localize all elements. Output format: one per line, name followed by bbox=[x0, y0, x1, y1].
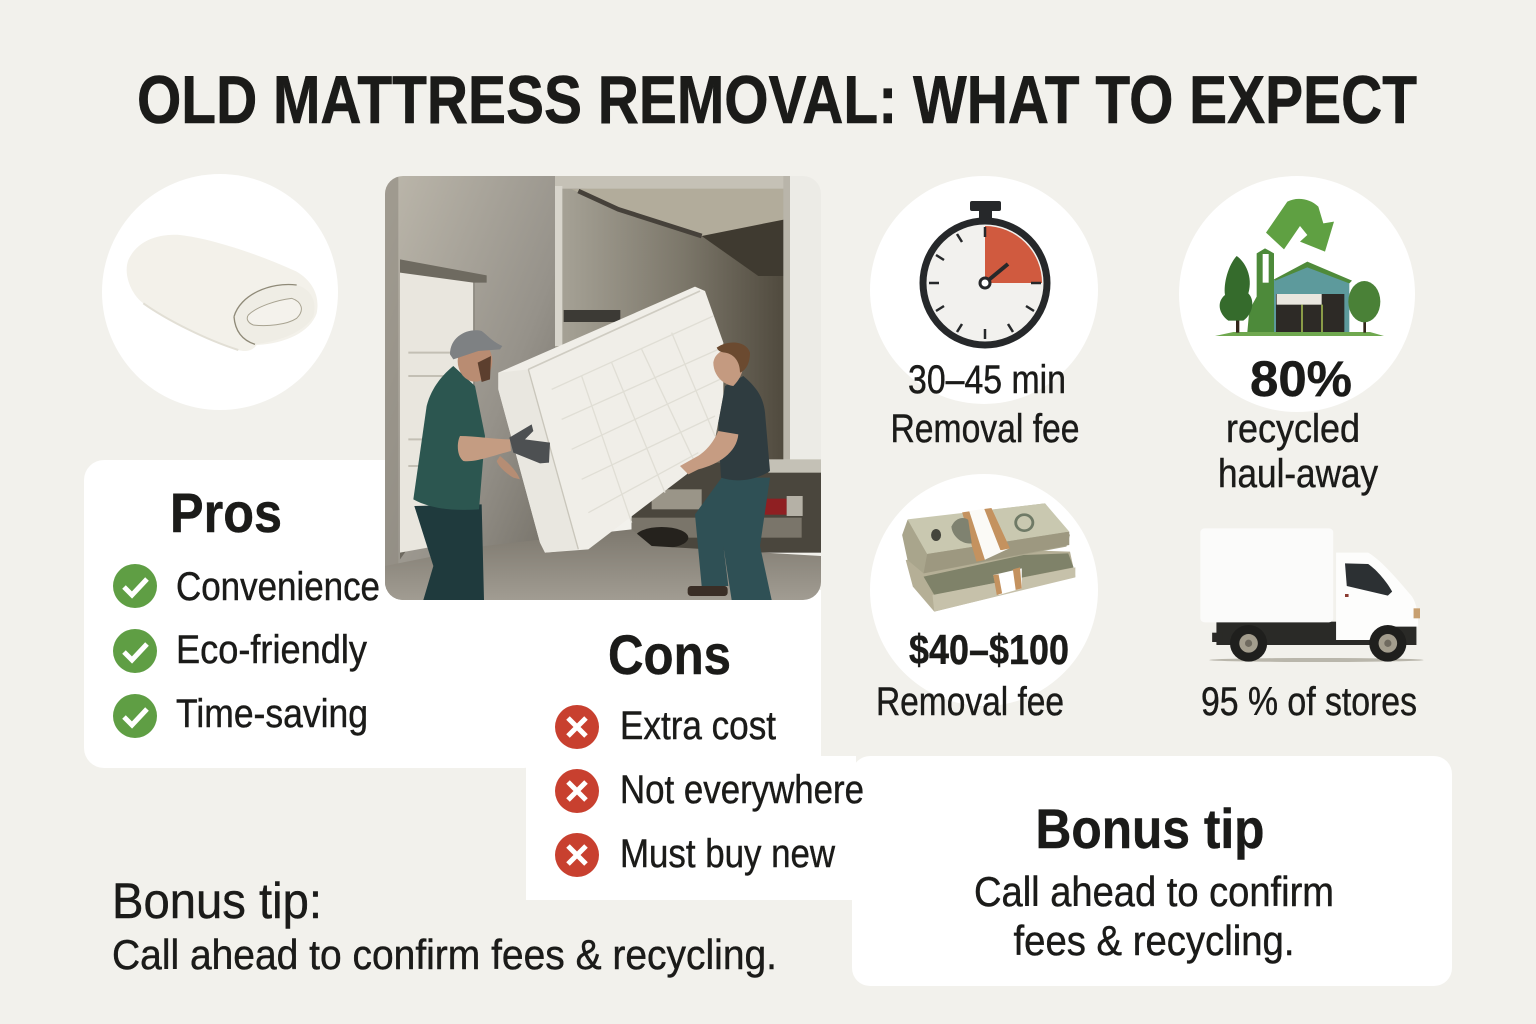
panel: bonus tip card bbox=[852, 756, 1452, 986]
tower bbox=[1247, 248, 1274, 332]
panel: bonus tip card: fees & recycling. bbox=[1014, 917, 1294, 964]
building wall bbox=[385, 176, 557, 600]
upper stack bbox=[902, 503, 1070, 573]
building bbox=[1274, 265, 1349, 332]
stat value: $40–$100 bbox=[909, 626, 1069, 673]
truck ceiling bbox=[572, 188, 784, 236]
card heading: Bonus tip bbox=[1036, 797, 1264, 860]
pro item: eco-friendly bbox=[113, 628, 367, 673]
icon: white box truck bbox=[1200, 528, 1424, 662]
con item: extra cost bbox=[555, 704, 776, 749]
ground bbox=[385, 529, 821, 600]
con item: extra cost: Extra cost bbox=[620, 704, 776, 748]
stat label: Removal fee bbox=[876, 680, 1064, 724]
truck frame and door bbox=[555, 186, 562, 346]
recycle arrow bbox=[1266, 199, 1334, 252]
stat: recycled bbox=[1179, 176, 1415, 496]
pro item: convenience: Convenience bbox=[176, 565, 380, 609]
bonus tip text bbox=[112, 873, 777, 978]
con item: must buy new bbox=[555, 832, 835, 877]
right mover bbox=[680, 342, 772, 600]
cons heading: Cons bbox=[608, 623, 731, 686]
pro item: time-saving bbox=[113, 692, 368, 738]
icon: cash stacks bbox=[902, 503, 1075, 612]
stat: recycled: haul-away bbox=[1218, 452, 1378, 496]
con item: not everywhere: Not everywhere bbox=[620, 768, 864, 812]
pros heading: Pros bbox=[170, 481, 282, 544]
door bbox=[400, 259, 487, 559]
icon: stopwatch bbox=[923, 201, 1047, 345]
lawn bbox=[1215, 332, 1384, 336]
stat: removal fee bbox=[870, 474, 1098, 724]
photo: two movers carrying a mattress bbox=[385, 176, 821, 600]
pro item: convenience bbox=[113, 564, 380, 609]
icon: recycling facility bbox=[1215, 199, 1384, 336]
icon: rolled mattress bbox=[102, 174, 338, 410]
pro item: time-saving: Time-saving bbox=[176, 692, 368, 736]
panel: pros bbox=[84, 460, 544, 768]
left mover bbox=[413, 330, 550, 600]
stat label: recycled bbox=[1226, 407, 1360, 451]
con item: not everywhere bbox=[555, 768, 864, 813]
stat label: 95 % of stores bbox=[1201, 680, 1417, 724]
stat value: 80% bbox=[1250, 351, 1352, 407]
truck lower body bbox=[632, 463, 821, 553]
card text: Call ahead to confirm bbox=[974, 868, 1334, 915]
lower stack bbox=[906, 550, 1075, 612]
mattress bbox=[498, 287, 723, 553]
con item: must buy new: Must buy new bbox=[620, 832, 835, 876]
stat: removal time: Removal fee bbox=[890, 407, 1080, 451]
stat label: 30–45 min bbox=[908, 358, 1066, 402]
panel: cons bbox=[526, 590, 864, 900]
bonus tip text: Bonus tip: bbox=[112, 873, 322, 929]
stat: removal time bbox=[870, 176, 1098, 451]
truck interior bbox=[555, 176, 788, 466]
bonus tip text: Call ahead to confirm fees & recycling. bbox=[112, 931, 777, 978]
stat: stores bbox=[1200, 528, 1424, 724]
pro item: eco-friendly: Eco-friendly bbox=[176, 628, 367, 672]
trees bbox=[1236, 317, 1239, 333]
